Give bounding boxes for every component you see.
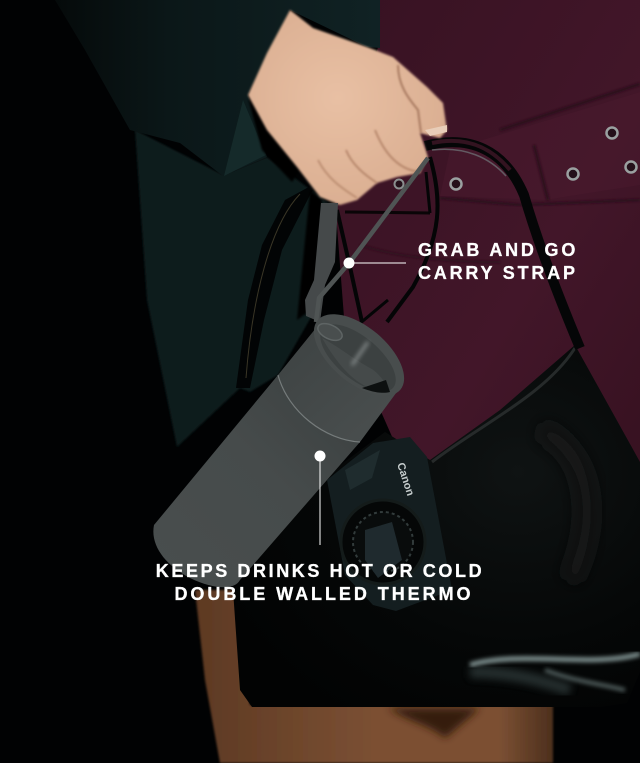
dress belt (345, 84, 640, 262)
heading: thermo: DOUBLE WALLED THERMO (174, 584, 473, 604)
cuff shadow (248, 98, 300, 182)
hand (248, 10, 447, 205)
bag (233, 141, 640, 707)
camera: Canon (394, 461, 416, 498)
bag leather highlight (470, 654, 640, 665)
legs (195, 590, 553, 763)
camera (327, 437, 452, 611)
thermo bottle (153, 299, 418, 587)
heading: thermo (156, 561, 484, 604)
lid rim (300, 299, 418, 411)
jacket sleeve (55, 0, 380, 176)
heading: carry strap: CARRY STRAP (418, 263, 578, 283)
heading: carry strap (418, 240, 578, 283)
lid opening (309, 312, 407, 404)
sleeve cuff flap (224, 100, 266, 176)
black cords (337, 157, 438, 330)
lid seam (278, 375, 360, 442)
camera lens (341, 500, 425, 584)
heading: carry strap: GRAB AND GO (418, 240, 578, 260)
bag handle left (236, 182, 322, 388)
bag handle right (425, 142, 580, 348)
heading: thermo: KEEPS DRINKS HOT OR COLD (156, 561, 484, 581)
thermo lid (278, 328, 402, 442)
carry strap (305, 158, 428, 322)
bag seam (432, 348, 575, 462)
dress (335, 0, 640, 500)
jacket body (135, 130, 336, 447)
